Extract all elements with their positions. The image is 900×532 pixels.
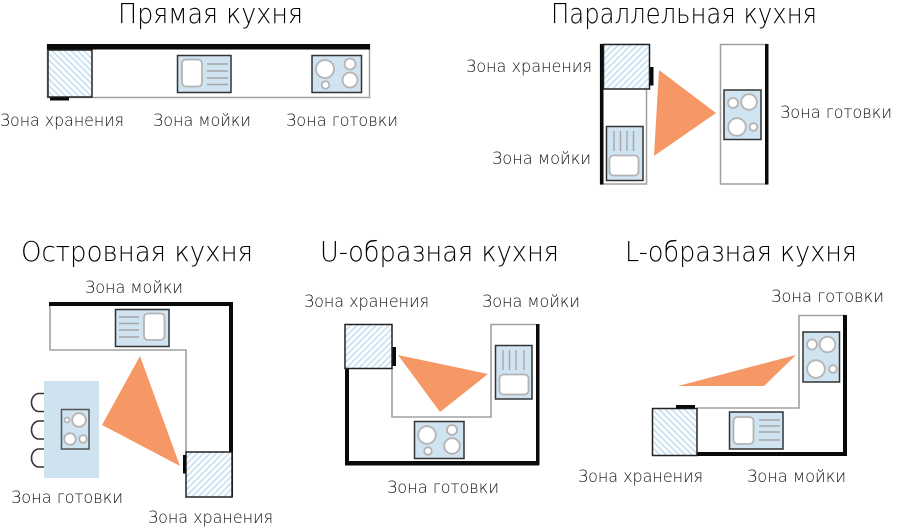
label: storage: Зона хранения — [0, 111, 124, 130]
panel: parallel kitchen — [466, 0, 892, 184]
label: storage: Зона хранения — [148, 508, 273, 527]
label: cooking: Зона готовки — [11, 488, 123, 507]
storage zone — [345, 324, 396, 368]
label: cooking: Зона готовки — [780, 103, 892, 122]
label: storage: Зона хранения — [578, 467, 703, 486]
heading: U-shaped kitchen: U-образная кухня — [320, 235, 559, 268]
label: sink: Зона мойки — [492, 149, 591, 168]
hob — [414, 422, 464, 458]
panel: island kitchen — [11, 235, 273, 527]
counter plan — [652, 315, 847, 456]
sink — [606, 126, 643, 180]
label: sink: Зона мойки — [747, 467, 846, 486]
sink — [496, 346, 532, 399]
storage zone — [652, 405, 697, 456]
sink — [178, 56, 231, 92]
label: sink: Зона мойки — [85, 278, 183, 297]
chairs — [32, 394, 44, 467]
right counter — [720, 44, 768, 184]
panel: U-shaped kitchen — [304, 235, 580, 497]
work triangle — [654, 70, 716, 156]
storage zone — [604, 44, 654, 89]
storage zone — [48, 50, 92, 100]
hob — [62, 410, 89, 449]
work triangle — [398, 355, 488, 412]
counter plan — [47, 44, 370, 98]
island — [44, 381, 99, 478]
label: cooking: Зона готовки — [286, 111, 398, 130]
hob — [724, 90, 761, 140]
storage zone — [183, 452, 232, 497]
label: storage: Зона хранения — [466, 57, 592, 76]
heading: island kitchen: Островная кухня — [21, 235, 253, 268]
label: sink: Зона мойки — [482, 292, 580, 311]
hob — [312, 56, 362, 92]
panel: straight kitchen — [0, 0, 398, 130]
hob — [803, 332, 840, 382]
work triangle — [678, 355, 796, 386]
label: cooking: Зона готовки — [387, 478, 499, 497]
sink — [116, 310, 169, 346]
work triangle — [102, 356, 180, 466]
panel: L-shaped kitchen — [578, 235, 884, 486]
sink — [730, 412, 783, 449]
label: sink: Зона мойки — [153, 111, 251, 130]
counter plan — [49, 302, 233, 497]
label: storage: Зона хранения — [304, 292, 429, 311]
counter plan — [345, 324, 540, 466]
heading: L-shaped kitchen: L-образная кухня — [625, 235, 857, 268]
left counter — [600, 44, 646, 184]
label: cooking: Зона готовки — [771, 287, 884, 306]
